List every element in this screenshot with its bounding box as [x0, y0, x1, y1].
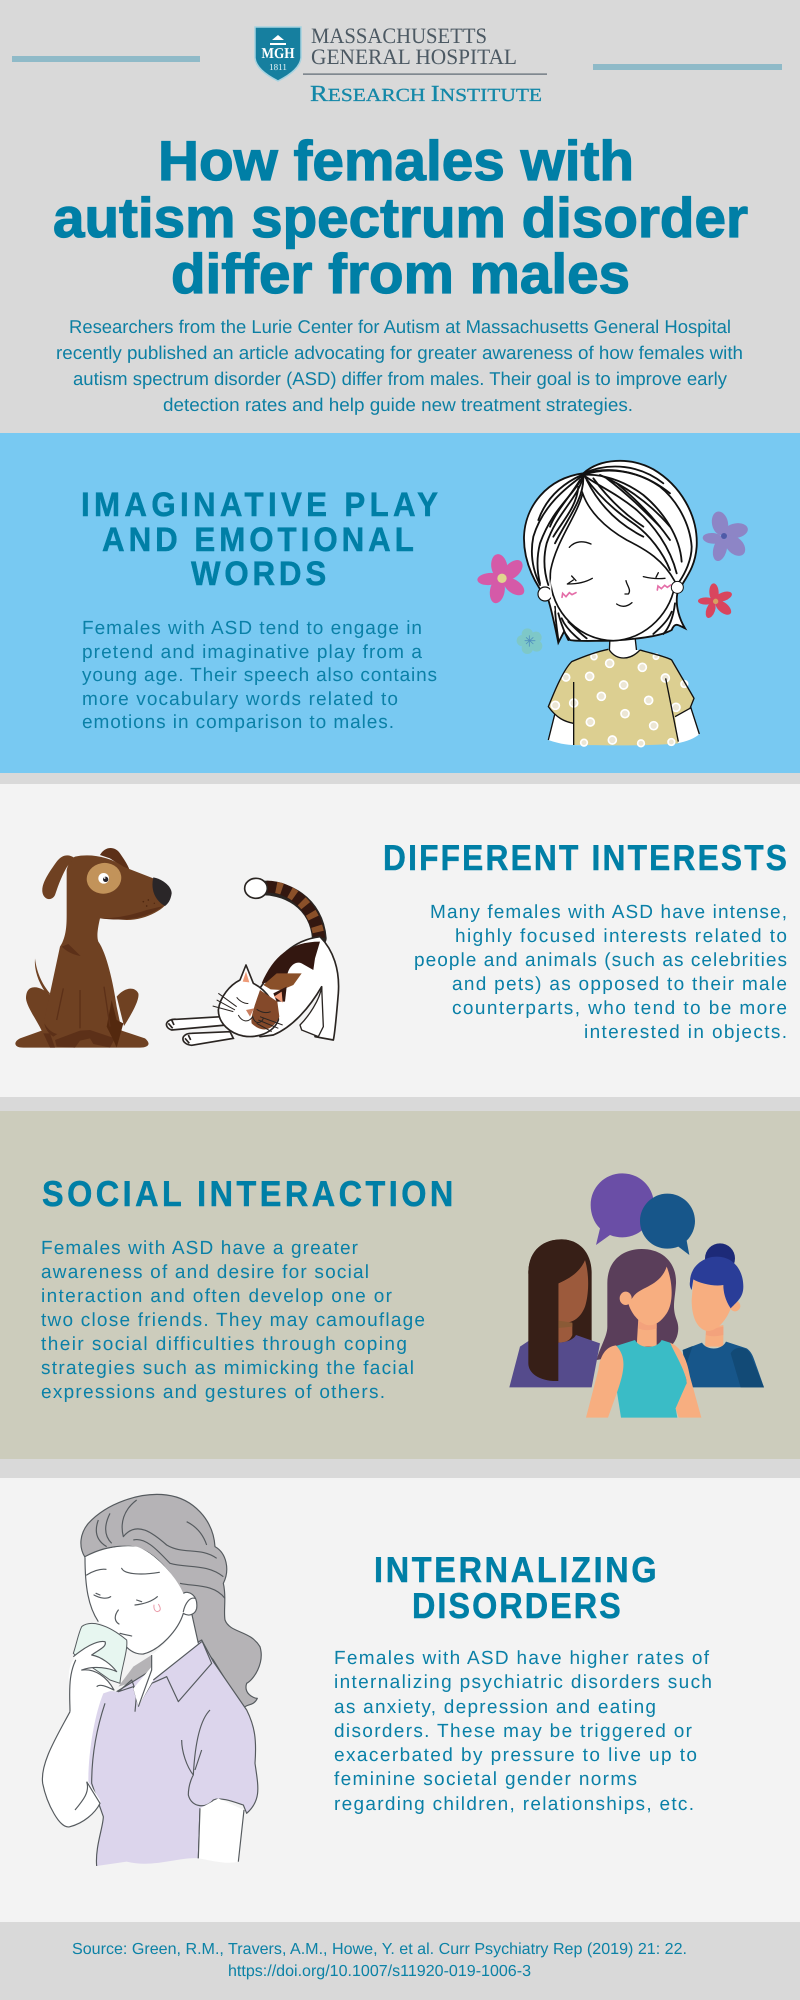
- heading: social interaction: SOCIAL INTERACTION: [42, 1173, 453, 1214]
- intro text: [56, 316, 743, 415]
- decorative bar: right: [593, 64, 782, 70]
- facial features: [562, 542, 671, 606]
- body text: internalizing disorders: disorders. These may be triggered or: [334, 1721, 693, 1742]
- panel: different interests: [0, 784, 800, 1097]
- intro text: recently published an article advocating for greater awareness of how females with: [56, 342, 743, 363]
- heading: imaginative play: IMAGINATIVE PLAY: [81, 486, 438, 524]
- icon: teal flower: [517, 628, 542, 654]
- icon: MGH shield: MGH: [262, 46, 295, 62]
- heading: imaginative play: WORDS: [191, 555, 326, 593]
- title: differ from males: [171, 242, 630, 305]
- face: [85, 1546, 197, 1654]
- title: autism spectrum disorder: [53, 186, 748, 249]
- hair: [524, 461, 697, 643]
- footer: source: https://doi.org/10.1007/s11920-019-1006-3: [228, 1963, 531, 1980]
- body text: imaginative play: emotions in comparison to males.: [82, 712, 394, 733]
- body text: internalizing disorders: feminine societal gender norms: [334, 1769, 637, 1790]
- body text: internalizing disorders: regarding children, relationships, etc.: [334, 1794, 694, 1815]
- body text: different interests: people and animals (such as celebrities: [414, 950, 787, 971]
- panel: internalizing disorders: [0, 1478, 800, 1922]
- shirt: [548, 649, 694, 747]
- speech bubble: purple: [591, 1173, 654, 1245]
- tail: [255, 888, 319, 938]
- logo wordmark line 3: RESEARCH INSTITUTE: [310, 81, 542, 106]
- body text: social interaction: interaction and often develop one or: [41, 1286, 393, 1307]
- face: [550, 493, 675, 641]
- logo wordmark line 2: GENERAL HOSPITAL: [311, 44, 517, 69]
- arms: [548, 705, 699, 745]
- icon: purple flower: [702, 510, 749, 563]
- heading: different interests: DIFFERENT INTERESTS: [383, 837, 787, 878]
- hair: [81, 1494, 261, 1708]
- body text: internalizing disorders: Females with ASD have higher rates of: [334, 1648, 710, 1669]
- icon: pink flower: [477, 553, 527, 604]
- icon: MGH shield: [255, 27, 301, 81]
- woman: left: [509, 1239, 600, 1387]
- title: [53, 129, 748, 305]
- ears: [538, 587, 552, 601]
- illustration: three women talking: [509, 1173, 764, 1418]
- body text: different interests: interested in objects.: [584, 1022, 787, 1043]
- heading: internalizing disorders: DISORDERS: [412, 1585, 621, 1626]
- body text: different interests: Many females with ASD have intense,: [430, 902, 787, 923]
- neck: [609, 637, 637, 652]
- intro text: detection rates and help guide new treatment strategies.: [163, 394, 633, 415]
- speech bubble: blue: [640, 1194, 695, 1255]
- decorative bar: left: [12, 56, 200, 62]
- panel: social interaction: [0, 1111, 800, 1459]
- illustration: crying woman: [42, 1494, 261, 1866]
- body text: internalizing disorders: as anxiety, depression and eating: [334, 1697, 656, 1718]
- body text: different interests: [414, 902, 787, 1043]
- icon: red flower: [698, 583, 734, 619]
- body text: imaginative play: Females with ASD tend to engage in: [82, 618, 422, 639]
- icon: MGH shield: 1811: [269, 62, 287, 72]
- heading: internalizing disorders: [374, 1549, 657, 1626]
- body text: different interests: highly focused interests related to: [455, 926, 787, 947]
- heading: internalizing disorders: INTERNALIZING: [374, 1549, 657, 1590]
- body text: social interaction: awareness of and desire for social: [41, 1262, 369, 1283]
- body text: social interaction: strategies such as mimicking the facial: [41, 1358, 414, 1379]
- right forearm: [198, 1798, 244, 1863]
- body text: different interests: and pets) as opposed to their male: [452, 974, 787, 995]
- illustration: cat: [166, 878, 339, 1045]
- body text: social interaction: two close friends. They may camouflage: [41, 1310, 425, 1331]
- panel: imaginative play and emotional words: [0, 433, 800, 773]
- body text: social interaction: expressions and gestures of others.: [41, 1382, 385, 1403]
- footer: source: Source: Green, R.M., Travers, A.M., Howe, Y. et al. Curr Psychiatry Rep (2019) 21: 22.: [72, 1941, 687, 1958]
- body text: social interaction: Females with ASD have a greater: [41, 1238, 359, 1259]
- body text: imaginative play: pretend and imaginative play from a: [82, 642, 422, 663]
- body text: internalizing disorders: internalizing psychiatric disorders such: [334, 1672, 712, 1693]
- body: [247, 937, 339, 1040]
- intro text: autism spectrum disorder (ASD) differ from males. Their goal is to improve early: [73, 368, 728, 389]
- hair strands: [96, 1500, 225, 1598]
- heading: imaginative play: [81, 486, 438, 593]
- tear: [154, 1604, 160, 1612]
- woman: right: [683, 1243, 764, 1387]
- body text: imaginative play: young age. Their speech also contains: [82, 665, 437, 686]
- body text: social interaction: their social difficulties through coping: [41, 1334, 407, 1355]
- footer: source: [72, 1941, 687, 1980]
- title: How females with: [158, 129, 634, 192]
- body text: internalizing disorders: exacerbated by pressure to live up to: [334, 1745, 697, 1766]
- front paws: [166, 1017, 227, 1030]
- header: [12, 23, 782, 415]
- woman: middle: [586, 1249, 701, 1418]
- logo wordmark line 1: MASSACHUSETTS: [311, 23, 487, 48]
- fingers: [73, 1641, 117, 1690]
- illustration: girl with flowers: [477, 461, 749, 747]
- head: [218, 965, 278, 1037]
- body text: social interaction: [41, 1238, 425, 1403]
- facial features: [87, 1568, 195, 1636]
- heading: imaginative play: AND EMOTIONAL: [102, 521, 414, 559]
- shirt: [87, 1640, 258, 1866]
- arm: [42, 1653, 113, 1827]
- illustration: dog: [15, 848, 172, 1048]
- body text: internalizing disorders: [334, 1648, 712, 1815]
- body text: imaginative play: [82, 618, 437, 733]
- intro text: Researchers from the Lurie Center for Autism at Massachusetts General Hospital: [69, 316, 731, 337]
- neck: [133, 1613, 198, 1707]
- tissue: [73, 1623, 127, 1683]
- body text: different interests: counterparts, who tend to be more: [452, 998, 787, 1019]
- body text: imaginative play: more vocabulary words related to: [82, 689, 398, 710]
- logo: Massachusetts General Hospital Research Institute: [255, 23, 547, 106]
